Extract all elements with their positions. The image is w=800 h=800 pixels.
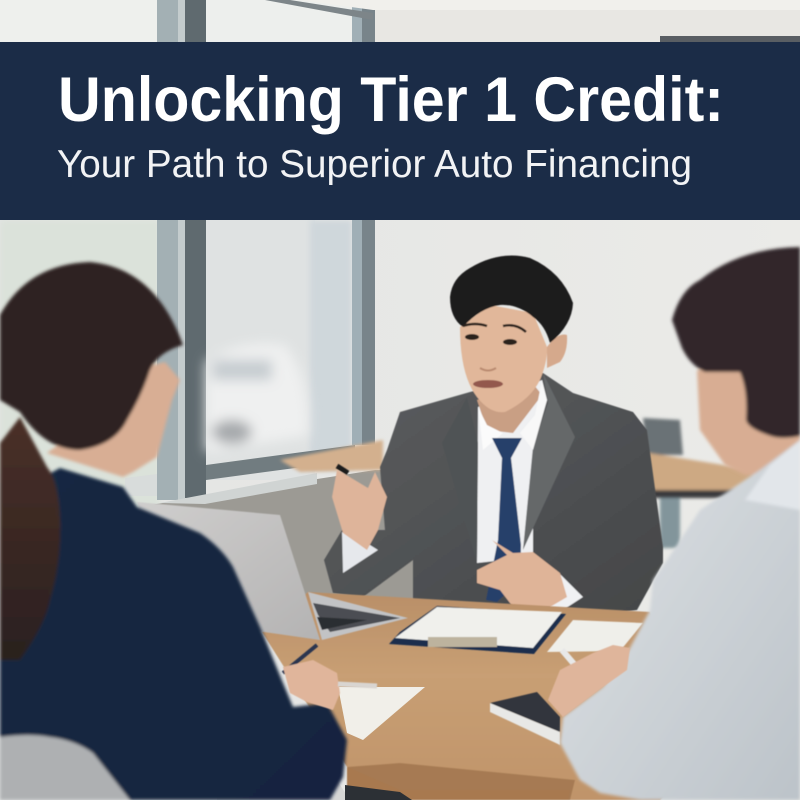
neck and face: [47, 362, 180, 477]
hair: [0, 262, 183, 450]
ponytail: [0, 417, 60, 660]
shirt collar and front: [477, 380, 547, 563]
jacket lapels: [442, 397, 478, 563]
woman's hand with pen and pencil: [283, 645, 377, 710]
notepad on the table: [338, 687, 425, 740]
shirt cuff on raised arm: [342, 532, 378, 573]
subtitle: Your Path to Superior Auto Financing: [57, 143, 692, 186]
face: [460, 305, 547, 412]
shirt: [560, 440, 800, 800]
neck: [477, 380, 542, 433]
black notebook: [490, 692, 560, 745]
collar points: [478, 380, 547, 450]
hair: [672, 247, 800, 438]
back table and chair: [280, 418, 755, 548]
hair: [450, 256, 573, 343]
blazer: [0, 468, 347, 800]
woman in navy blazer, seen from behind: [0, 262, 347, 800]
chair: [0, 735, 130, 800]
foreground wooden table: [262, 592, 712, 800]
title banner: [0, 42, 800, 220]
clipboard with papers: [389, 606, 643, 654]
lower hand: [477, 540, 567, 607]
ear: [547, 334, 567, 368]
face and neck: [697, 370, 800, 475]
man in grey suit: [324, 256, 663, 617]
person in light shirt, seen from behind: [560, 247, 800, 800]
open laptop: [137, 502, 408, 640]
eyes, nose and mouth: [463, 324, 526, 388]
suit jacket: [324, 373, 663, 617]
floor under table: [217, 770, 412, 800]
title: Unlocking Tier 1 Credit:: [58, 65, 724, 135]
necktie: [486, 438, 522, 602]
right person's hand with pen: [548, 645, 630, 717]
chair edge: [668, 745, 720, 800]
shirt cuff on lower arm: [545, 570, 583, 612]
raised hand with pen: [332, 466, 387, 550]
parked car seen through window: [206, 343, 308, 452]
